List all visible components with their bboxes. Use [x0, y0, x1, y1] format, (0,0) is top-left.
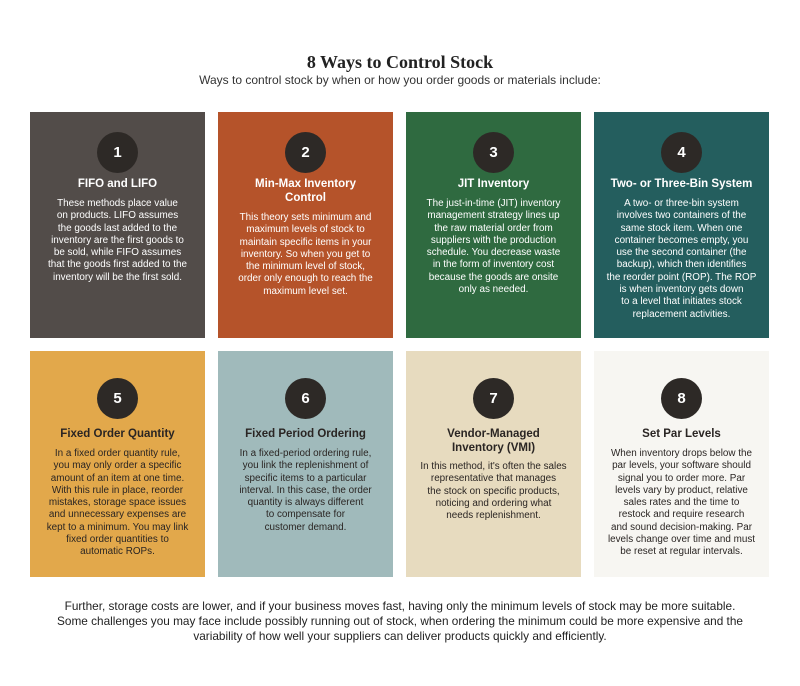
text block: and unnecessary expenses are: [49, 509, 186, 520]
text block: in the form of inventory cost: [433, 259, 554, 270]
icon: number 5: 5: [113, 390, 122, 407]
text block: inventory. So when you get to: [241, 249, 370, 260]
text block: same stock item. When one: [621, 223, 742, 234]
text block: you link the replenishment of: [243, 460, 368, 471]
text block: levels change over time and must: [608, 534, 755, 545]
text block: signal you to order more. Par: [618, 473, 745, 484]
text block: [420, 461, 567, 521]
text block: inventory are the first goods to: [51, 235, 184, 246]
text block: maximum level set.: [263, 286, 348, 297]
text block: These methods place value: [57, 198, 178, 209]
text block: the reorder point (ROP). The ROP: [607, 272, 756, 283]
panel: 3 JIT: [406, 112, 581, 338]
heading: Fixed Period Ordering: [245, 428, 366, 440]
text block: amount of an item at one time.: [51, 473, 184, 484]
heading: Inventory (VMI): [452, 442, 535, 454]
icon: number 8: 8: [677, 390, 686, 407]
text block: inventory will be the first sold.: [53, 272, 182, 283]
text block: the minimum level of stock,: [246, 261, 365, 272]
icon: number 2: [285, 132, 326, 173]
text block: on products. LIFO assumes: [57, 210, 178, 221]
heading: Set Par Levels: [642, 428, 721, 440]
icon: number 6: [285, 378, 326, 419]
text block: customer demand.: [265, 522, 346, 533]
text block: [608, 448, 755, 557]
text block: the goods last added to the: [58, 223, 177, 234]
text block: because the goods are onsite: [429, 272, 558, 283]
subtitle: Ways to control stock by when or how you order goods or materials include:: [199, 73, 601, 87]
text block: automatic ROPs.: [80, 546, 155, 557]
text block: to compensate for: [266, 509, 345, 520]
icon: number 8: [661, 378, 702, 419]
title: 8 Ways to Control Stock: [307, 52, 493, 72]
text block: With this rule in place, reorder: [52, 485, 183, 496]
text block: [48, 198, 187, 283]
text block: maintain specific items in your: [240, 237, 371, 248]
panel: 8 Par Levels: [594, 351, 769, 577]
heading: JIT Inventory: [458, 178, 529, 190]
text block: par levels, your software should: [612, 460, 751, 471]
panel: 4 Bin System: [594, 112, 769, 338]
text block: you may only order a specific: [54, 460, 181, 471]
panel: 1 FIFO and LIFO: [30, 112, 205, 338]
icon: number 7: [473, 378, 514, 419]
footer text: Some challenges you may face include possibly running out of stock, when ordering the minimum could be more expensive and the: [57, 614, 743, 628]
text block: [238, 212, 373, 297]
text block: noticing and ordering what: [436, 498, 551, 509]
text block: specific items to a particular: [245, 473, 366, 484]
text block: replacement activities.: [633, 309, 730, 320]
text block: [426, 198, 560, 295]
footer text: Further, storage costs are lower, and if your business moves fast, having only the minimum levels of stock may be more suitable.: [65, 599, 735, 613]
text block: backup), which then identifies: [617, 259, 746, 270]
text block: This theory sets minimum and: [240, 212, 371, 223]
heading: Fixed Order Quantity: [60, 428, 175, 440]
icon: number 5: [97, 378, 138, 419]
panel: 6 Fixed Period Ordering: [218, 351, 393, 577]
text block: kept to a minimum. You may link: [47, 522, 188, 533]
heading: Min-Max Inventory: [255, 178, 356, 190]
text block: schedule. You decrease waste: [427, 247, 560, 258]
text block: suppliers with the production: [431, 235, 556, 246]
text block: management strategy lines up: [427, 210, 560, 221]
panel: 2 Min-Max: [218, 112, 393, 338]
heading: Control: [285, 192, 326, 204]
icon: number 3: [473, 132, 514, 173]
text block: In a fixed-period ordering rule,: [240, 448, 371, 459]
text block: interval. In this case, the order: [239, 485, 372, 496]
text block: be sold, while FIFO assumes: [54, 247, 181, 258]
text block: container becomes empty, you: [615, 235, 748, 246]
text block: the stock on specific products,: [427, 486, 560, 497]
text block: use the second container (the: [616, 247, 747, 258]
heading: [255, 178, 356, 204]
icon: number 6: 6: [301, 390, 310, 407]
text block: levels vary by product, relative: [615, 485, 748, 496]
text block: be reset at regular intervals.: [620, 546, 743, 557]
icon: number 3: 3: [489, 144, 498, 161]
text block: quantity is always different: [248, 497, 363, 508]
text block: representative that manages: [431, 473, 556, 484]
text block: is when inventory gets down: [619, 284, 744, 295]
text block: [606, 198, 756, 320]
footer text: variability of how well your suppliers can deliver products quickly and efficiently.: [193, 629, 607, 643]
icon: number 1: [97, 132, 138, 173]
text block: In this method, it's often the sales: [420, 461, 567, 472]
text block: maximum levels of stock to: [246, 224, 365, 235]
icon: number 7: 7: [489, 390, 498, 407]
heading: [447, 428, 540, 454]
heading: Two- or Three-Bin System: [611, 178, 752, 190]
text block: A two- or three-bin system: [624, 198, 739, 209]
icon: number 1: 1: [113, 144, 122, 161]
heading: FIFO and LIFO: [78, 178, 157, 190]
text block: restock and require research: [619, 509, 744, 520]
text block: order only enough to reach the: [238, 273, 373, 284]
text block: mistakes, storage space issues: [49, 497, 186, 508]
text block: the raw material order from: [434, 223, 553, 234]
text block: to a level that initiates stock: [621, 296, 742, 307]
text block: that the goods first added to the: [48, 259, 187, 270]
icon: number 4: [661, 132, 702, 173]
text block: only as needed.: [459, 284, 528, 295]
footer text: [57, 599, 743, 643]
text block: needs replenishment.: [446, 510, 541, 521]
icon: number 4: 4: [677, 144, 686, 161]
panel: 7 VMI: [406, 351, 581, 577]
text block: [47, 448, 188, 557]
text block: [239, 448, 372, 533]
text block: fixed order quantities to: [66, 534, 169, 545]
text block: sales rates and the time to: [624, 497, 739, 508]
icon: number 2: 2: [301, 144, 310, 161]
text block: The just-in-time (JIT) inventory: [427, 198, 560, 209]
text block: and sound decision-making. Par: [611, 522, 752, 533]
text block: When inventory drops below the: [611, 448, 752, 459]
heading: Vendor-Managed: [447, 428, 540, 440]
panel: 5 Fixed Order Quantity: [30, 351, 205, 577]
text block: involves two containers of the: [617, 210, 746, 221]
text block: In a fixed order quantity rule,: [55, 448, 180, 459]
